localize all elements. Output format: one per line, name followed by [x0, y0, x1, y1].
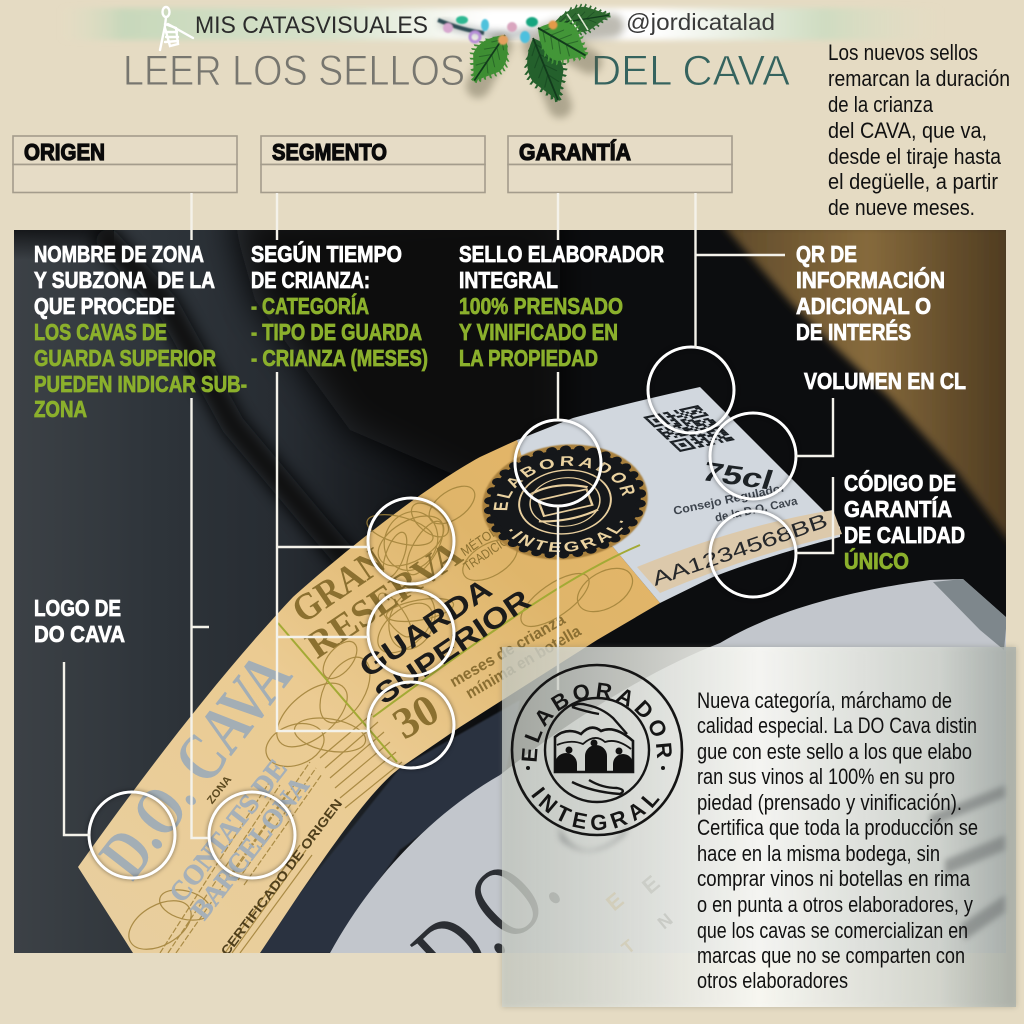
label: 30: 30 [384, 684, 447, 749]
panel: segmento header: SEGMENTO [272, 139, 387, 165]
panel paragraph [697, 688, 978, 993]
panel: garantia header: GARANTÍA [519, 138, 631, 165]
text block: codigo: ÚNICO [844, 547, 909, 574]
black region top centre [220, 230, 452, 476]
label: zona text: ZONA [205, 774, 234, 806]
label: certified origin text: CERTIFICADO DE ORIGEN [218, 796, 345, 958]
text block: qr: ADICIONAL O [796, 293, 931, 319]
string lights [438, 16, 558, 45]
text block: segmento: - TIPO DE GUARDA [251, 319, 422, 345]
panel paragraph: gue con este sello a los que elabo [697, 739, 972, 764]
text block: origen: PUEDEN INDICAR SUB- [34, 371, 247, 397]
brown background top right [723, 225, 1012, 545]
faint letters: E [637, 870, 664, 899]
label: guarda superior [362, 582, 532, 702]
panel: segmento header [261, 136, 485, 192]
panel paragraph: Nueva categoría, márchamo de [697, 688, 952, 713]
text block: codigo: CÓDIGO DE [844, 469, 956, 496]
bottle lower light surface [330, 579, 1007, 953]
seal lettering [522, 682, 672, 830]
label: subzone name: BARCELONA [185, 770, 316, 926]
text block: segmento: SEGÚN TIEMPO [251, 240, 402, 267]
guilloche scribbles [121, 479, 640, 959]
text block: logo [34, 595, 125, 647]
gold label band [78, 440, 660, 953]
icon: elaborador integral seal [510, 664, 684, 836]
panel paragraph: que los cavas se comercializan en [697, 918, 968, 943]
seal dots [526, 766, 665, 770]
photo of cava bottle label [14, 230, 1006, 953]
green lines on label [278, 545, 640, 762]
panel paragraph: hace en la misma bodega, sin [697, 841, 940, 866]
faint letters: T [618, 936, 639, 958]
slate bottle tones [14, 230, 417, 953]
text block: segmento: DE CRIANZA: [251, 267, 370, 293]
label: QR code [644, 406, 734, 451]
text block: origen: ZONA [34, 396, 87, 422]
faint letters: N [654, 909, 677, 933]
seal lettering: ELABORADOR [522, 682, 672, 762]
panel paragraph: marcas que no se comparten con [697, 943, 965, 968]
text block: origen: Y SUBZONA DE LA [34, 267, 215, 293]
frond left [457, 24, 522, 93]
text block: garantia [459, 241, 664, 371]
panel: origen header: ORIGEN [24, 139, 105, 165]
label: guarantee code: AA1234568BB [649, 510, 831, 591]
label: consejo regulador: Consejo Regulador [672, 482, 787, 518]
dark streak [100, 232, 360, 575]
text block: codigo: GARANTÍA [844, 495, 952, 522]
label: consejo regulador: de la D.O. Cava [714, 495, 799, 525]
label: elaborador integral seal: ELABORADOR [494, 456, 635, 510]
intro text: de la crianza [828, 92, 934, 117]
textured bottle strip [933, 579, 1007, 650]
label: guarda superior: SUPERIOR [369, 584, 537, 711]
label: D.O. CAVA logo text: D.O. CAVA [84, 638, 306, 892]
label: elaborador integral seal [482, 444, 649, 560]
white label section [517, 387, 840, 603]
label: metodo tradicional [460, 528, 506, 570]
text block: codigo: DE CALIDAD [844, 522, 965, 548]
text block: origen: GUARDA SUPERIOR [34, 345, 216, 371]
text block: garantia: 100% PRENSADO [459, 293, 623, 319]
label: 75cl volume: 75cl [698, 456, 777, 495]
label: elaborador integral seal: ·INTEGRAL· [509, 520, 624, 552]
bottle large lettering: D.O. [391, 826, 580, 1013]
text block: qr [796, 241, 945, 345]
icon: corkscrew [160, 7, 193, 50]
title: DEL CAVA [591, 47, 790, 95]
seal lettering: INTEGRAL [531, 786, 660, 830]
title [123, 47, 790, 95]
text block: garantia: INTEGRAL [459, 267, 558, 293]
label: metodo tradicional: TRADICIONAL [461, 521, 529, 574]
brand name: MIS CATASVISUALES [195, 12, 428, 39]
frond centre [514, 30, 578, 109]
frond top [551, 0, 613, 39]
header banner [60, 7, 960, 50]
text block: qr: DE INTERÉS [796, 318, 911, 345]
callout circles [89, 347, 796, 878]
label: metodo tradicional: MÉTODO [458, 518, 509, 559]
text block: logo: DO CAVA [34, 621, 125, 647]
text block: garantia: SELLO ELABORADOR [459, 241, 664, 267]
winery building [555, 728, 633, 772]
faint letters: E [601, 887, 628, 916]
text block: qr: INFORMACIÓN [796, 266, 945, 293]
text block: logo: LOGO DE [34, 595, 121, 621]
text block: origen [34, 241, 247, 422]
text block: codigo [844, 469, 965, 574]
blurred background marks [558, 785, 1005, 940]
intro text: el degüelle, a partir [828, 169, 998, 194]
panel: origen header [13, 136, 237, 192]
text block: volumen: VOLUMEN EN CL [804, 368, 966, 394]
panel paragraph: ran sus vinos al 100% en su pro [697, 764, 955, 789]
title: LEER LOS SELLOS [123, 47, 465, 95]
text block: segmento: - CRIANZA (MESES) [251, 345, 428, 371]
text block: segmento: - CATEGORÍA [251, 292, 369, 319]
social handle: @jordicatalad [626, 9, 775, 35]
text block: garantia: LA PROPIEDAD [459, 345, 598, 371]
intro text: desde el tiraje hasta [828, 144, 1002, 169]
intro text [828, 40, 1010, 220]
label: subzone name: CONTATS DE [163, 754, 294, 908]
panel paragraph: piedad (prensado y vinificación). [697, 790, 962, 815]
intro text: Los nuevos sellos [828, 40, 978, 65]
label: gran reserva: GRAN [285, 540, 393, 632]
panel paragraph: comprar vinos ni botellas en rima [697, 866, 971, 891]
code strip [637, 510, 842, 593]
text block: origen: QUE PROCEDE [34, 293, 175, 319]
label: months of ageing: mínima en botella [463, 623, 584, 703]
panel: elaborador integral explanation [500, 644, 1018, 1010]
label: gran reserva: RESERVA [299, 532, 470, 667]
intro text: del CAVA, que va, [828, 118, 987, 143]
label: months of ageing: meses de crianza [447, 611, 568, 691]
hands [572, 704, 627, 794]
text block: segmento [251, 240, 428, 371]
text block: qr: QR DE [796, 241, 857, 267]
icon: pine garland [438, 0, 613, 109]
faint letters [601, 870, 677, 958]
panel paragraph: o en punta a otros elaboradores, y [697, 892, 973, 917]
panel paragraph: otros elaboradores [697, 968, 848, 993]
label: guarda superior: GUARDA [354, 573, 498, 684]
panel: garantia header [508, 136, 732, 192]
text block: origen: NOMBRE DE ZONA [34, 241, 204, 267]
text block: garantia: Y VINIFICADO EN [459, 319, 618, 345]
frond right [526, 7, 598, 77]
text block: origen: LOS CAVAS DE [34, 319, 167, 345]
slate band below label [260, 700, 520, 953]
intro text: de nueve meses. [828, 195, 975, 220]
connector lines [64, 193, 833, 838]
